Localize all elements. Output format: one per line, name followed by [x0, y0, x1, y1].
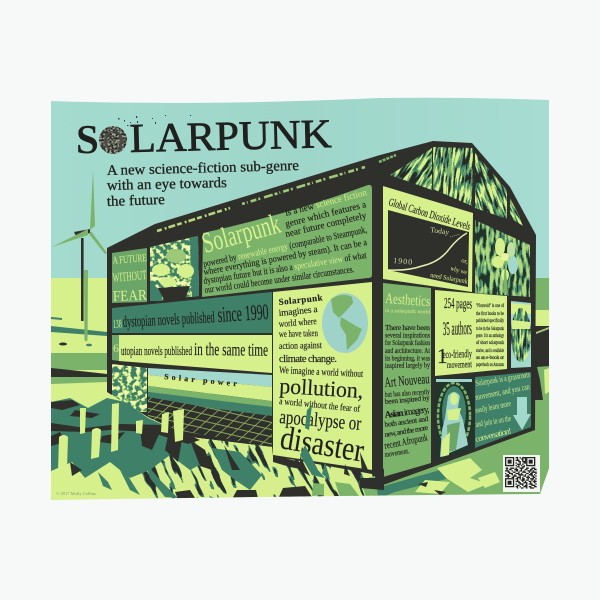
book description text: genre. It is an anthology [476, 333, 504, 339]
line chart [388, 210, 469, 287]
icon: globe [322, 293, 368, 353]
aesthetics body text: several inspirations [385, 330, 430, 340]
panel: grassroots call to action [474, 369, 531, 448]
panel: global carbon dioxide: need Solarpunk [430, 271, 469, 286]
book description text: as an e-book or [476, 355, 504, 361]
panel: book stats: 35 authors [442, 318, 472, 340]
subtitle: the future [107, 192, 165, 210]
line chart: Today [430, 225, 450, 237]
subtitle: with an eye towards [107, 175, 227, 194]
panel: dystopian novels stat: dystopian novels published [122, 309, 215, 331]
image: shrub photo [112, 364, 147, 412]
subtitle: A new science-fiction sub-genre [107, 158, 299, 179]
panel: grassroots call to action: easily learn more [474, 398, 512, 415]
grass over text [300, 405, 330, 480]
aesthetics body text: been inspired by [384, 393, 430, 406]
panel: utopian novels stat [112, 335, 272, 373]
panel: solarpunk imagines: Solarpunk [278, 292, 323, 307]
panel: dystopian novels stat: since 1990 [217, 299, 269, 327]
definition text: dystopian future but it is also a speculative view of what [203, 250, 368, 287]
subtitle [107, 158, 299, 210]
panel: global carbon dioxide [383, 186, 473, 292]
panel: book stats: 254 pages [444, 296, 472, 312]
panel: solarpunk imagines: climate change. [279, 354, 337, 365]
book description text: the first books to be [476, 310, 504, 317]
panel: a future without fear: A FUTURE [112, 252, 147, 267]
book description text: paperback on Amazon [476, 362, 504, 368]
image: art nouveau portrait [435, 377, 473, 460]
copyright note: © 2017 Molly Collins [56, 491, 96, 496]
panel: book stats: movement [447, 360, 472, 371]
panel: grassroots call to action: and join in on the [475, 413, 512, 429]
panel: solarpunk imagines: disaster [278, 420, 366, 469]
panel: solarpunk imagines: apocalypse or [279, 406, 362, 435]
image: book cover [511, 301, 531, 368]
panel: solarpunk imagines: We imagine a world without [279, 365, 363, 380]
panel: utopian novels stat: utopian novels published [121, 343, 192, 358]
aesthetics body text: its beginning, it was [385, 354, 430, 362]
panel: aesthetics: Aesthetics [385, 291, 431, 310]
line chart: 1900 [393, 256, 413, 267]
title: solarpunk: S [76, 116, 99, 162]
panel: dystopian novels stat [112, 292, 272, 333]
definition text: genre which features a [284, 199, 368, 230]
arrow: down [513, 397, 531, 430]
panel: global carbon dioxide: why we [449, 265, 468, 276]
panel: book stats: eco-friendly [443, 348, 472, 361]
panel: solarpunk imagines: imagines a [278, 305, 319, 319]
panel: a future without fear: FEAR [113, 288, 147, 305]
ground landscape left [51, 278, 107, 395]
ground landscape right [535, 278, 549, 480]
panel: solarpunk definition [198, 185, 372, 297]
icon: wind turbine [52, 170, 107, 342]
roof window strips [157, 155, 396, 231]
panel: book stats: 1 [437, 344, 448, 368]
ground under building right [364, 432, 549, 496]
aesthetics body text: new, and the more [384, 423, 429, 439]
aesthetics body text: for Solarpunk fashion [385, 338, 430, 347]
panel: grassroots call to action: movement, and you can [474, 381, 531, 402]
definition text: our world could become under similar circumstances. [204, 265, 355, 296]
panel: solarpunk imagines: action against [279, 341, 322, 352]
panel: grassroots call to action: Solarpunk is a grassroots [475, 369, 531, 388]
panel: book stats [435, 290, 507, 376]
aesthetics body text: but has also recently [385, 387, 430, 399]
book description text [476, 302, 504, 368]
image: roof grass pane three [475, 153, 507, 219]
aesthetics body text: Art Nouveau [384, 372, 430, 391]
book description text: "Nonvoid" is one of [476, 302, 504, 309]
panel: solarpunk imagines: we have taken [279, 329, 318, 340]
panel: utopian novels stat: in the same time [194, 339, 268, 360]
book description text: published specifically [476, 317, 504, 324]
title: solarpunk: LARPUNK [129, 110, 333, 161]
panel: solarpunk imagines: a world without the fear of [279, 396, 361, 415]
panel: aesthetics [383, 283, 431, 477]
foreground grass [51, 392, 384, 500]
image: roof grass pane four [510, 198, 525, 226]
panel: utopian novels stat: 6 [113, 341, 119, 355]
heading: solarpunk: Solarpunk [198, 208, 284, 260]
panel: dystopian novels stat: 138 [112, 317, 122, 331]
panel: a future without fear [112, 248, 147, 305]
poster sheet [51, 98, 549, 500]
book description text: to be in the Solarpunk [476, 326, 504, 332]
definition text: near future completely [284, 210, 368, 240]
grass streaks [98, 470, 178, 498]
aesthetics body text: Asian imagery, [384, 405, 430, 421]
icon: dandelion O: O [103, 125, 124, 157]
aesthetics body text: movement. [384, 446, 410, 459]
book description text: of short solarpunk [476, 339, 504, 346]
definition text: where everything is powered by steam). It can be a [203, 237, 368, 278]
aesthetics body text: inspired largely by [385, 360, 430, 370]
panel: solarpunk imagines [273, 282, 372, 470]
panel: global carbon dioxide: or, [460, 257, 469, 266]
image: flower [475, 220, 530, 297]
panel: global carbon dioxide: Global Carbon Dioxide Levels [387, 196, 472, 233]
building frame [107, 141, 536, 489]
caption: solar power: Solar power [164, 372, 238, 388]
image: roof grass pane two [433, 147, 473, 206]
image: roof grass pane one [390, 148, 432, 190]
definition text: powered by renewable energy (comparable to Steampunk, [202, 224, 368, 270]
panel: grassroots call to action: conversation! [474, 425, 512, 444]
QR code [503, 455, 540, 492]
definition text [202, 187, 368, 296]
panel: solarpunk imagines: world where [278, 317, 317, 330]
icon: dandelion O [98, 115, 191, 157]
panel: aesthetics: in a solarpunk world [385, 308, 430, 316]
image: solar power field [148, 368, 272, 447]
aesthetics body text [383, 323, 431, 459]
book description text: stories, and is available [476, 348, 504, 354]
aesthetics body text: both ancient and [384, 414, 429, 429]
aesthetics body text: recent Afropunk [383, 432, 429, 452]
image: potted plant [150, 236, 199, 301]
sky background [51, 95, 549, 285]
definition text: is a new science fiction [284, 187, 368, 219]
aesthetics body text: and architecture. At [385, 346, 431, 355]
panel: a future without fear: WITHOUT [112, 267, 147, 285]
panel: solarpunk imagines: pollution, [279, 373, 364, 403]
aesthetics body text: There have been [385, 323, 430, 332]
